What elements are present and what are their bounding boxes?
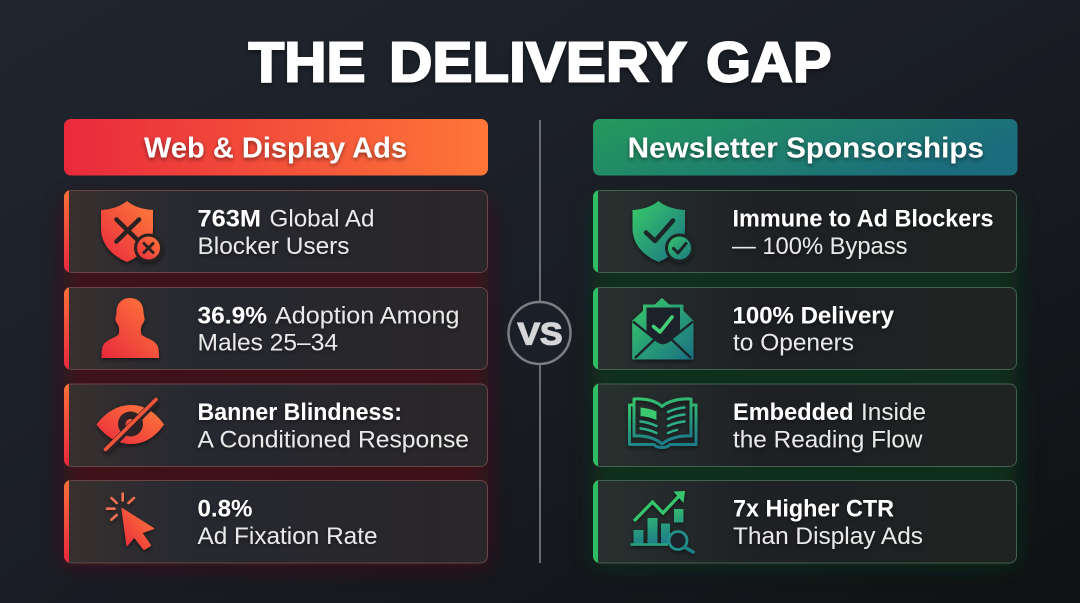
text: 7x higher ctr than display ads: Than Display Ads (733, 523, 923, 550)
icon: open book (630, 399, 696, 448)
title: DELIVERY (389, 30, 687, 94)
text: 7x higher ctr than display ads (733, 496, 923, 550)
text: 763M global ad blocker users: Global Ad (270, 206, 374, 233)
text: banner blindness a conditioned response: A Conditioned Response (198, 426, 469, 454)
text: 100% delivery to openers: 100% Delivery (732, 302, 895, 329)
title: GAP (706, 30, 832, 94)
card: immune to ad blockers (593, 190, 1016, 272)
text: 0.8% ad fixation rate: Ad Fixation Rate (198, 523, 378, 550)
text: embedded inside the reading flow: Inside (861, 399, 926, 426)
header: newsletter sponsorships: Newsletter Sponsorships (628, 133, 984, 165)
text: immune to ad blockers 100% bypass (732, 206, 994, 260)
icon: growth chart with magnifier (630, 491, 693, 552)
title: THE (248, 30, 366, 94)
title (248, 30, 832, 94)
header: newsletter sponsorships (593, 119, 1018, 176)
text: 36.9% adoption among males 25-34 (198, 302, 460, 357)
card: ad fixation rate (64, 480, 488, 563)
card: 7x higher ctr (593, 480, 1016, 563)
icon: shield with check (632, 201, 692, 262)
icon: crossed eye (96, 400, 164, 451)
text: 36.9% adoption among males 25-34: Adoption Among (275, 302, 460, 329)
text: embedded inside the reading flow: Embedded (733, 399, 854, 426)
card: adoption among males (64, 287, 488, 370)
text: 0.8% ad fixation rate (198, 496, 378, 550)
icon: open envelope with check (633, 298, 693, 359)
vs badge: VS (518, 316, 562, 352)
text: 100% delivery to openers (732, 302, 895, 357)
text: 7x higher ctr than display ads: 7x Higher CTR (733, 496, 894, 523)
text: embedded inside the reading flow (733, 399, 926, 454)
card: 100% delivery (593, 287, 1016, 370)
icon: person (102, 298, 159, 358)
text: immune to ad blockers 100% bypass: — 100% Bypass (732, 233, 908, 260)
vs badge (508, 302, 570, 364)
text: banner blindness a conditioned response (198, 399, 469, 454)
panel: web and display ads (64, 119, 488, 563)
text: 36.9% adoption among males 25-34: 36.9% (198, 302, 267, 329)
text: 100% delivery to openers: to Openers (733, 330, 854, 357)
text: embedded inside the reading flow: the Reading Flow (733, 426, 923, 454)
icon: shield with x (101, 201, 162, 262)
text: banner blindness a conditioned response: Banner Blindness: (198, 399, 402, 426)
card: embedded inside reading flow (593, 384, 1016, 466)
icon: cursor click (107, 494, 154, 550)
text: 763M global ad blocker users: 763M (198, 206, 261, 233)
text: 36.9% adoption among males 25-34: Males 25–34 (198, 330, 338, 357)
divider and vs badge (508, 120, 570, 563)
text: immune to ad blockers 100% bypass: Immune to Ad Blockers (732, 206, 994, 233)
header: web and display ads (64, 119, 488, 176)
card: ad blocker users (64, 190, 488, 272)
text: 0.8% ad fixation rate: 0.8% (198, 496, 252, 523)
panel: newsletter sponsorships (593, 119, 1018, 563)
card: banner blindness (64, 384, 488, 466)
header: web and display ads: Web & Display Ads (144, 133, 407, 165)
text: 763M global ad blocker users: Blocker Users (198, 233, 350, 260)
text: 763M global ad blocker users (198, 206, 374, 260)
